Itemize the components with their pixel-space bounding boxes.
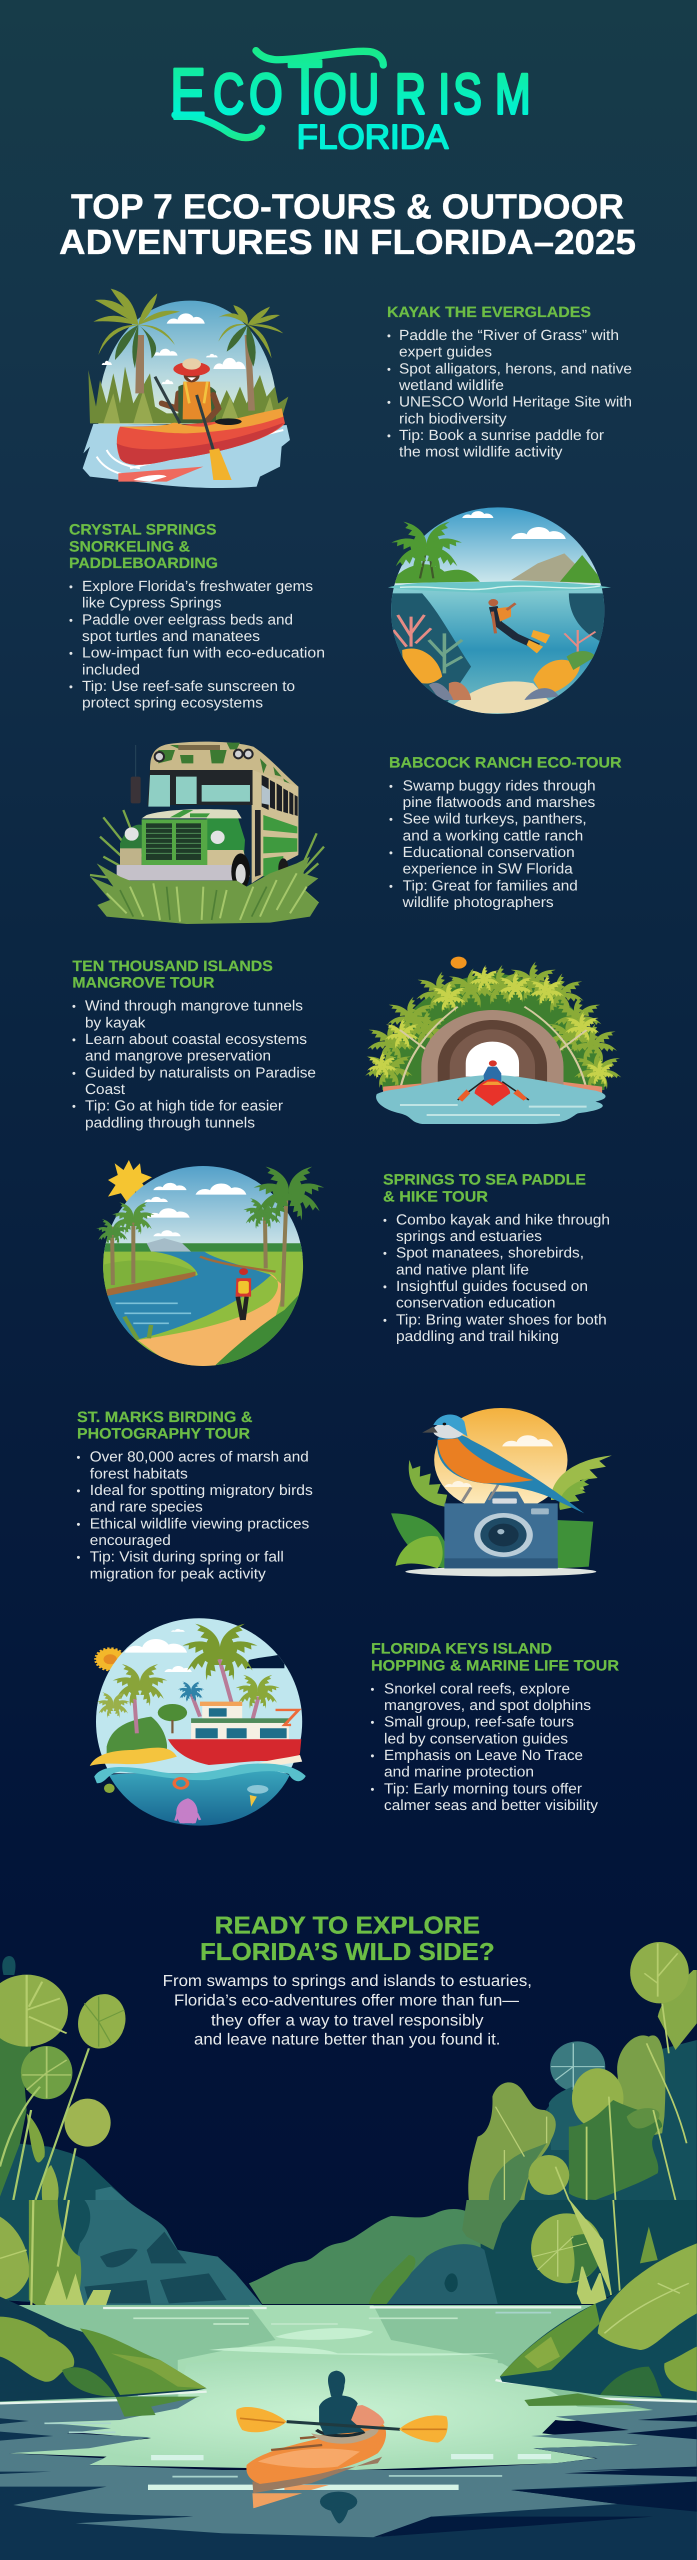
left foliage <box>0 1956 129 2200</box>
bullet list: wildlife photographers <box>402 895 554 911</box>
bullet list: See wild turkeys, panthers, <box>403 812 587 828</box>
heading: PHOTOGRAPHY TOUR <box>77 1426 250 1443</box>
bullet list: Tip: Great for families and <box>403 878 578 894</box>
bullet list: • <box>370 1717 374 1729</box>
bullet list: Swamp buggy rides through <box>403 778 596 794</box>
title: ADVENTURES IN FLORIDA–2025 <box>59 223 636 262</box>
bullet list: pine flatwoods and marshes <box>403 795 595 811</box>
bullet list: • <box>387 364 391 376</box>
bullet list: and mangrove preservation <box>85 1049 271 1065</box>
illustration: snorkeler underwater <box>388 507 611 715</box>
heading: ST. MARKS BIRDING & <box>77 1409 253 1426</box>
bullet list: • <box>76 1552 80 1564</box>
logo: Ecotourism Florida: OURISM <box>313 62 531 126</box>
call-to-action paragraph <box>163 1973 532 2049</box>
bullet list: Learn about coastal ecosystems <box>85 1032 307 1048</box>
heading <box>69 522 218 572</box>
call-to-action paragraph: From swamps to springs and islands to estuaries, <box>163 1973 532 1990</box>
bullet list: Spot manatees, shorebirds, <box>396 1246 584 1262</box>
illustration: camouflage swamp buggy bus <box>90 742 324 924</box>
bullet list: Low-impact fun with eco-education <box>82 646 325 662</box>
bullet list: • <box>69 615 73 627</box>
bullet list: Combo kayak and hike through <box>396 1212 610 1228</box>
bullet list: Coast <box>85 1082 125 1098</box>
bullet list: • <box>389 781 393 793</box>
call-to-action heading <box>200 1912 495 1966</box>
bullet list: and native plant life <box>396 1262 529 1278</box>
bullet list <box>389 778 596 911</box>
far shoreline and forest <box>0 2200 697 2330</box>
bullet list: • <box>72 1101 76 1113</box>
heading: SPRINGS TO SEA PADDLE <box>383 1172 586 1189</box>
bullet list: and rare species <box>90 1500 203 1516</box>
bullet list: conservation education <box>396 1296 556 1312</box>
bullet list: Guided by naturalists on Paradise <box>85 1065 316 1081</box>
bullet list: mangroves, and spot dolphins <box>384 1698 591 1714</box>
panel: St. Marks <box>76 1409 313 1582</box>
bullet list: spot turtles and manatees <box>82 629 260 645</box>
bullet list: springs and estuaries <box>396 1229 542 1245</box>
bullet list: and marine protection <box>384 1765 534 1781</box>
bullet list <box>387 328 632 461</box>
heading: MANGROVE TOUR <box>72 975 215 992</box>
bullet list: paddling through tunnels <box>85 1115 255 1131</box>
lake water <box>0 2305 697 2560</box>
bullet list: Spot alligators, herons, and native <box>399 361 632 377</box>
bullet list: • <box>69 648 73 660</box>
bullet list: Paddle over eelgrass beds and <box>82 612 293 628</box>
panel: Kayak the Everglades <box>387 304 632 461</box>
bullet list: paddling and trail hiking <box>396 1329 559 1345</box>
bullet list: • <box>76 1519 80 1531</box>
bullet list: Tip: Book a sunrise paddle for <box>399 428 604 444</box>
bullet list: • <box>387 397 391 409</box>
heading <box>77 1409 253 1443</box>
panel: Florida Keys <box>370 1641 619 1814</box>
heading: FLORIDA KEYS ISLAND <box>371 1641 552 1658</box>
call-to-action heading: FLORIDA’S WILD SIDE? <box>200 1939 495 1966</box>
illustration: mangrove tunnel <box>364 957 622 1124</box>
logo: Ecotourism Florida <box>170 44 531 156</box>
illustration: hiker along a river <box>96 1160 325 1368</box>
bullet list: Wind through mangrove tunnels <box>85 999 303 1015</box>
bullet list <box>76 1450 313 1582</box>
bullet list: • <box>389 814 393 826</box>
call-to-action paragraph: and leave nature better than you found it. <box>194 2032 500 2049</box>
bullet list: protect spring ecosystems <box>82 696 263 712</box>
heading: SNORKELING & <box>69 538 190 555</box>
bullet list <box>69 579 325 712</box>
right foliage <box>468 1942 697 2200</box>
heading: HOPPING & MARINE LIFE TOUR <box>371 1657 619 1674</box>
heading: BABCOCK RANCH ECO-TOUR <box>389 754 622 771</box>
title <box>59 187 636 262</box>
bullet list: led by conservation guides <box>384 1731 568 1747</box>
bullet list: Tip: Visit during spring or fall <box>90 1550 284 1566</box>
call-to-action paragraph: they offer a way to travel responsibly <box>211 2012 484 2029</box>
heading: PADDLEBOARDING <box>69 555 218 572</box>
bullet list: • <box>76 1452 80 1464</box>
call-to-action heading: READY TO EXPLORE <box>215 1912 480 1939</box>
heading <box>383 1172 586 1205</box>
bullet list: by kayak <box>85 1015 146 1031</box>
bullet list: the most wildlife activity <box>399 445 563 461</box>
bullet list: migration for peak activity <box>90 1566 266 1582</box>
bullet list: expert guides <box>399 345 492 361</box>
bullet list: included <box>82 662 140 678</box>
bullet list: Emphasis on Leave No Trace <box>384 1748 583 1764</box>
bullet list: Paddle the “River of Grass” with <box>399 328 619 344</box>
bullet list: Tip: Go at high tide for easier <box>85 1099 283 1115</box>
illustration: island boat and marine life <box>90 1617 306 1826</box>
bullet list: • <box>370 1784 374 1796</box>
bullet list <box>72 999 316 1131</box>
left bank <box>0 2297 207 2402</box>
heading: & HIKE TOUR <box>383 1188 488 1205</box>
kayaker with paddle <box>236 2371 448 2524</box>
bullet list: • <box>72 1001 76 1013</box>
illustration: kayaker in the Everglades <box>83 289 290 488</box>
panel: Springs to Sea <box>383 1172 610 1345</box>
bullet list: Over 80,000 acres of marsh and <box>90 1450 309 1466</box>
bullet list <box>383 1212 610 1345</box>
bullet list: • <box>389 881 393 893</box>
heading <box>371 1641 619 1674</box>
heading: CRYSTAL SPRINGS <box>69 522 216 539</box>
heading: KAYAK THE EVERGLADES <box>387 304 591 321</box>
bullet list: Tip: Bring water shoes for both <box>396 1312 607 1328</box>
bullet list <box>370 1681 599 1814</box>
bullet list: UNESCO World Heritage Site with <box>399 395 632 411</box>
logo: Ecotourism Florida: CO <box>213 62 282 126</box>
bullet list: • <box>72 1034 76 1046</box>
bullet list: calmer seas and better visibility <box>384 1798 599 1814</box>
heading: TEN THOUSAND ISLANDS <box>72 958 273 975</box>
panel: Crystal Springs <box>69 522 325 712</box>
illustration: river scene with kayaker <box>0 1942 697 2560</box>
bullet list: like Cypress Springs <box>82 596 222 612</box>
bullet list: Explore Florida’s freshwater gems <box>82 579 313 595</box>
logo: Ecotourism Florida: T <box>287 44 323 130</box>
bullet list: Educational conservation <box>403 845 575 861</box>
bullet list: • <box>370 1750 374 1762</box>
bullet list: wetland wildlife <box>398 378 504 394</box>
bullet list: • <box>383 1282 387 1294</box>
bullet list: encouraged <box>90 1533 171 1549</box>
call-to-action paragraph: Florida’s eco-adventures offer more than fun— <box>174 1993 519 2010</box>
bullet list: • <box>370 1684 374 1696</box>
bullet list: Ideal for spotting migratory birds <box>90 1483 313 1499</box>
heading <box>72 958 273 992</box>
bullet list: • <box>72 1068 76 1080</box>
bullet list: • <box>383 1315 387 1327</box>
bullet list: Tip: Use reef-safe sunscreen to <box>82 679 295 695</box>
illustration: bird on camera <box>391 1408 618 1576</box>
right bank <box>500 2243 697 2400</box>
bullet list: Ethical wildlife viewing practices <box>90 1516 309 1532</box>
call to action <box>163 1912 532 2049</box>
bullet list: rich biodiversity <box>399 411 507 427</box>
title: TOP 7 ECO-TOURS & OUTDOOR <box>71 187 624 226</box>
bullet list: forest habitats <box>90 1466 188 1482</box>
panel: Babcock Ranch <box>389 754 622 911</box>
logo: Ecotourism Florida: FLORIDA <box>297 117 448 156</box>
bullet list: • <box>387 330 391 342</box>
bullet list: • <box>389 848 393 860</box>
bullet list: • <box>76 1486 80 1498</box>
logo: Ecotourism Florida: E <box>170 53 206 134</box>
bullet list: • <box>383 1215 387 1227</box>
bullet list: Small group, reef-safe tours <box>384 1715 574 1731</box>
bullet list: • <box>69 582 73 594</box>
bullet list: Snorkel coral reefs, explore <box>384 1681 570 1697</box>
bullet list: • <box>387 430 391 442</box>
bullet list: • <box>383 1248 387 1260</box>
bullet list: Insightful guides focused on <box>396 1279 588 1295</box>
bullet list: • <box>69 682 73 694</box>
bullet list: experience in SW Florida <box>403 862 574 878</box>
bullet list: Tip: Early morning tours offer <box>384 1781 582 1797</box>
panel: Ten Thousand Islands <box>72 958 316 1131</box>
bullet list: and a working cattle ranch <box>403 828 583 844</box>
